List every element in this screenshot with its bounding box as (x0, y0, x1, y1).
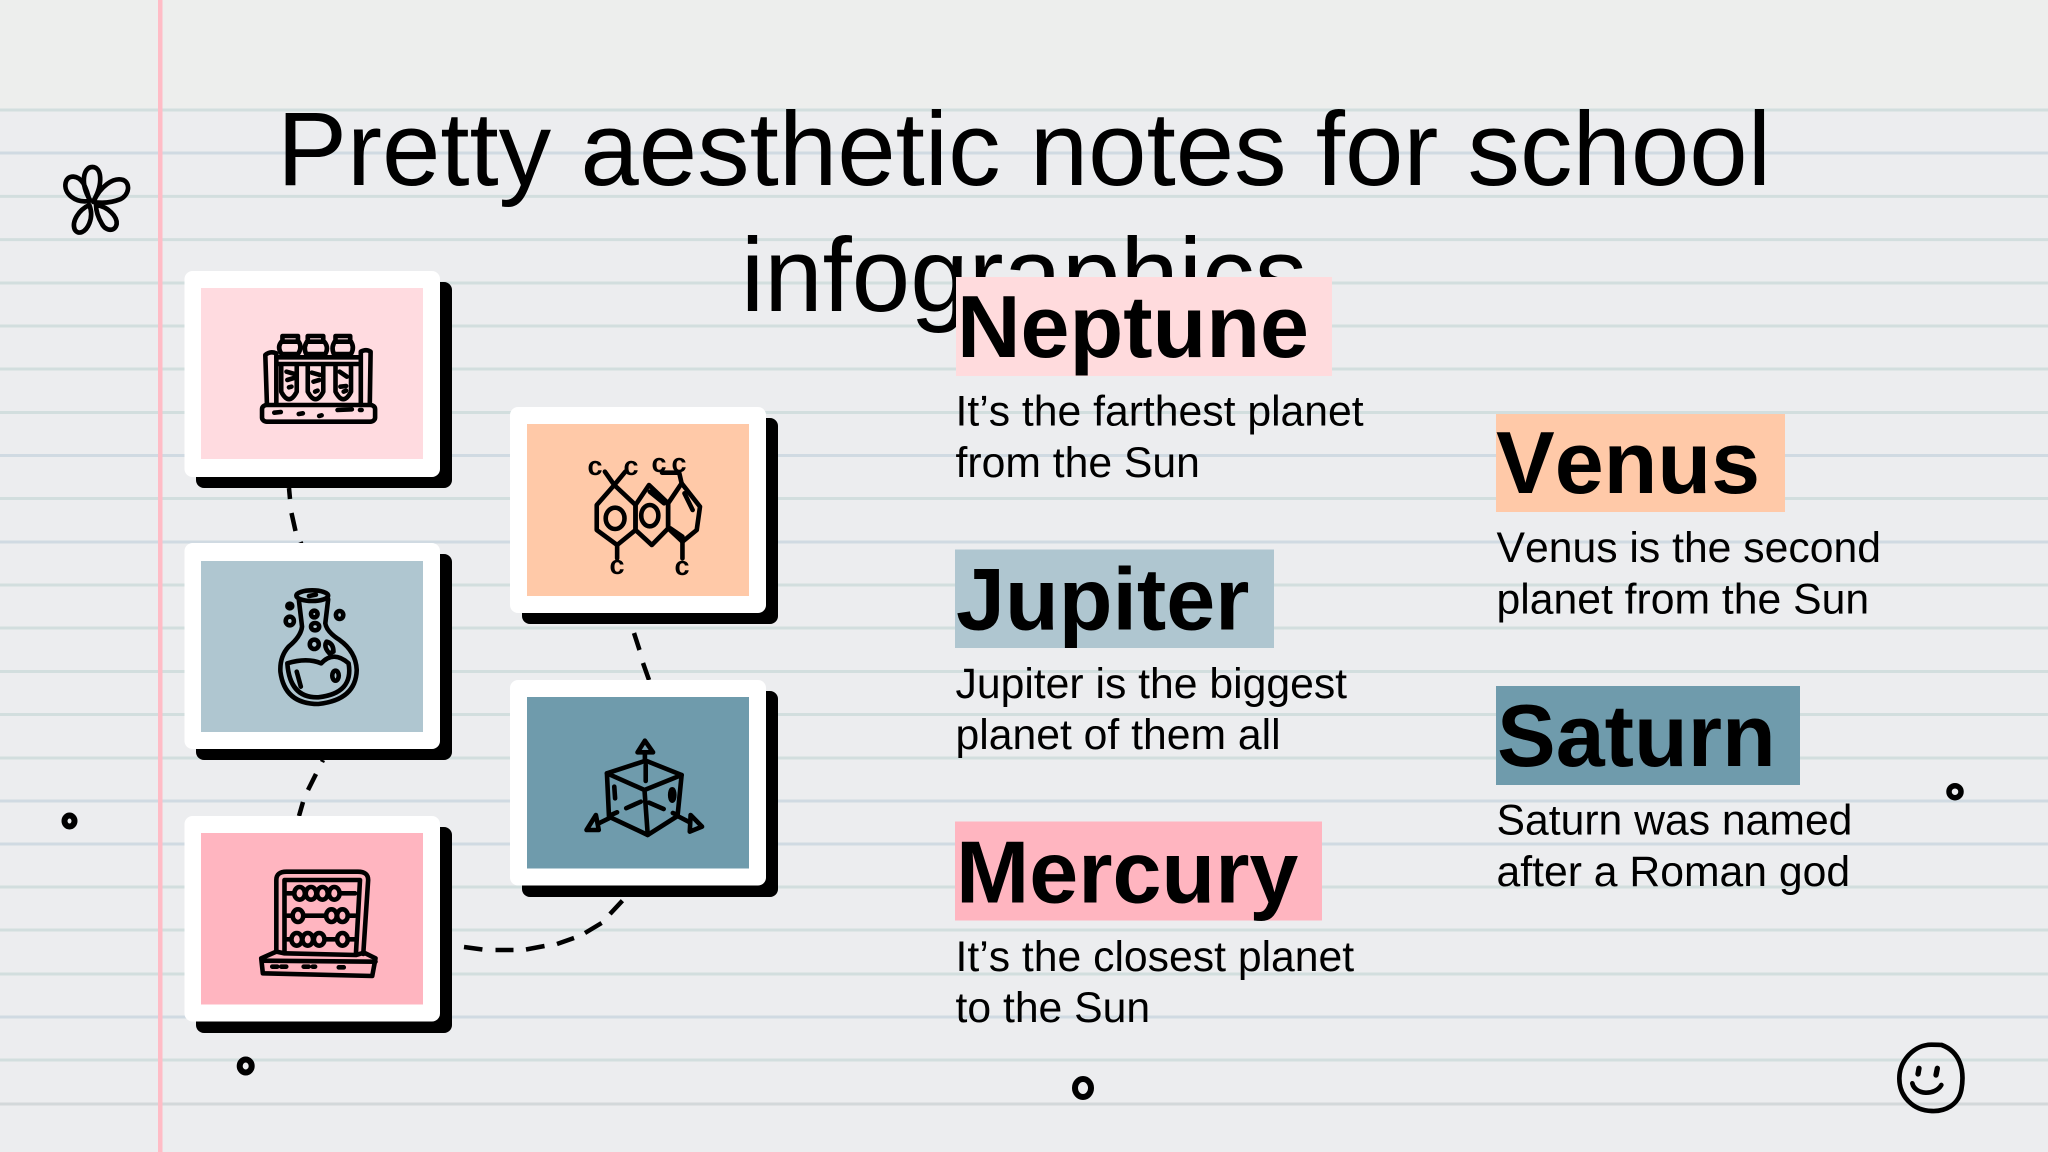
icon: cube (587, 741, 702, 835)
item: Jupiter (955, 550, 1347, 759)
dashed connector: molecule to cube (634, 633, 649, 680)
item: Neptune: It’s the farthest planet (956, 388, 1364, 436)
title: infographics (741, 217, 1307, 334)
panel: test tubes card (184, 271, 452, 488)
item: Neptune (956, 277, 1364, 487)
item: Jupiter: planet of them all (956, 711, 1281, 759)
item: Saturn: Saturn was named (1496, 796, 1852, 844)
item: Saturn (1496, 686, 1852, 896)
dashed connector: flask to abacus (299, 760, 323, 816)
icon: abacus (261, 872, 376, 976)
item: Mercury: to the Sun (956, 984, 1150, 1032)
item: Neptune: Neptune (957, 277, 1309, 376)
panel: flask card (184, 543, 452, 760)
panel: cube card (510, 680, 778, 897)
icon: molecule: c (623, 451, 639, 481)
icon: flask (280, 590, 357, 704)
icon: molecule: c (671, 448, 687, 478)
icon: small ring right (1949, 786, 1961, 798)
title: Pretty aesthetic notes for school (277, 91, 1771, 208)
panel: molecule card (510, 407, 778, 624)
icon: test tubes (262, 336, 375, 422)
title (277, 91, 1771, 334)
icon: small ring bottom centre (1075, 1079, 1091, 1097)
item: Venus: planet from the Sun (1496, 576, 1869, 624)
item: Saturn: Saturn (1497, 686, 1776, 785)
item: Mercury (955, 822, 1354, 1032)
item: Mercury: Mercury (956, 822, 1298, 922)
item: Saturn: after a Roman god (1496, 848, 1850, 896)
item: Mercury: It’s the closest planet (956, 933, 1354, 981)
icon: molecule (587, 448, 700, 581)
item: Jupiter: Jupiter (956, 550, 1249, 648)
icon: molecule: c (651, 448, 667, 478)
icon: small ring left (64, 816, 74, 826)
item: Venus: Venus is the second (1496, 524, 1881, 572)
item: Venus: Venus (1496, 413, 1760, 512)
icon: molecule: c (609, 550, 625, 580)
icon: flower doodle (65, 167, 128, 233)
item: Venus (1496, 413, 1881, 624)
icon: molecule: c (587, 451, 603, 481)
dashed connector: test tubes to flask (289, 488, 302, 544)
icon: molecule: c (674, 551, 690, 581)
icon: small ring bottom left (240, 1060, 252, 1072)
item: Jupiter: Jupiter is the biggest (956, 660, 1347, 708)
panel: abacus card (184, 816, 452, 1033)
dashed connector: cube to abacus (464, 901, 622, 950)
item: Neptune: from the Sun (956, 439, 1200, 487)
icon: smiley doodle (1899, 1045, 1962, 1111)
